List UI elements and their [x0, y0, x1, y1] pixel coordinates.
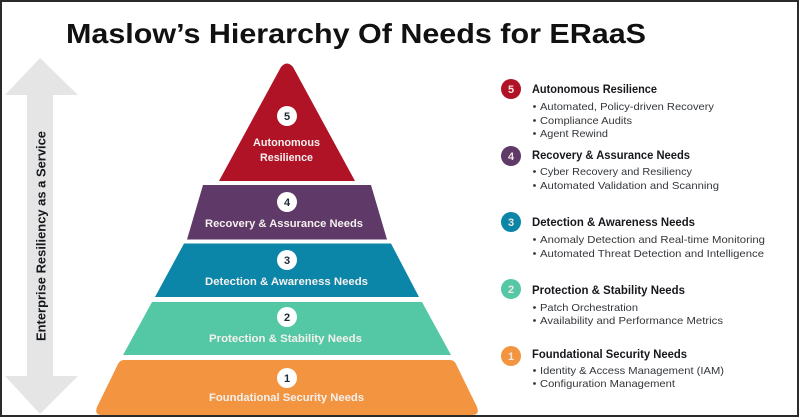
- legend 5: Autonomous Resilience: Automated, Policy-driven Recovery: [540, 101, 715, 113]
- legend 5: Autonomous Resilience: Compliance Audits: [540, 115, 632, 127]
- legend 5: Autonomous Resilience: 5: [508, 84, 514, 96]
- tier 2: Protection & Stability Needs: Protection & Stability Needs: [209, 333, 362, 345]
- tier 4: Recovery & Assurance Needs: 4: [284, 197, 291, 209]
- tier 3: Detection & Awareness Needs: Detection & Awareness Needs: [205, 276, 368, 288]
- title: Maslow’s Hierarchy Of Needs for ERaaS: [66, 18, 646, 49]
- legend 5: Autonomous Resilience: Agent Rewind: [540, 128, 608, 140]
- legend 5: Autonomous Resilience: Autonomous Resilience: [532, 84, 657, 96]
- tier 1: Foundational Security Needs: 1: [284, 373, 290, 385]
- tier 5: Autonomous Resilience: Autonomous: [253, 137, 320, 149]
- tier 4: Recovery & Assurance Needs: [187, 185, 387, 240]
- legend 2: Protection & Stability Needs: Patch Orchestration: [540, 302, 638, 314]
- tier 3: Detection & Awareness Needs: [155, 244, 419, 297]
- legend 2: Protection & Stability Needs: Availability and Performance Metrics: [540, 315, 723, 327]
- tier 2: Protection & Stability Needs: 2: [284, 312, 290, 324]
- legend 2: Protection & Stability Needs: [501, 279, 723, 327]
- legend 4: Recovery & Assurance Needs: Cyber Recovery and Resiliency: [540, 166, 693, 178]
- legend 3: Detection & Awareness Needs: Automated Threat Detection and Intelligence: [540, 248, 764, 260]
- legend 1: Foundational Security Needs: Foundational Security Needs: [532, 349, 687, 361]
- legend 1: Foundational Security Needs: Identity & Access Management (IAM): [540, 365, 724, 377]
- tier 1: Foundational Security Needs: Foundational Security Needs: [209, 392, 364, 404]
- legend 4: Recovery & Assurance Needs: 4: [508, 151, 515, 163]
- legend 5: Autonomous Resilience: [501, 79, 715, 140]
- legend 3: Detection & Awareness Needs: [501, 212, 765, 260]
- legend 3: Detection & Awareness Needs: Detection & Awareness Needs: [532, 217, 695, 229]
- legend 4: Recovery & Assurance Needs: Recovery & Assurance Needs: [532, 150, 690, 162]
- legend list: [501, 79, 765, 390]
- legend 1: Foundational Security Needs: 1: [508, 351, 514, 363]
- legend 4: Recovery & Assurance Needs: Automated Validation and Scanning: [540, 180, 719, 192]
- legend 4: Recovery & Assurance Needs: [501, 146, 719, 192]
- arrow label: Enterprise Resiliency as a Service: [34, 131, 48, 341]
- legend 1: Foundational Security Needs: Configuration Management: [540, 378, 675, 390]
- legend 3: Detection & Awareness Needs: Anomaly Detection and Real-time Monitoring: [540, 234, 765, 246]
- double-headed vertical arrow: Enterprise Resiliency as a Service: [5, 58, 78, 414]
- tier 5: Autonomous Resilience: [219, 64, 355, 181]
- legend 1: Foundational Security Needs: [501, 346, 724, 390]
- tier 4: Recovery & Assurance Needs: Recovery & Assurance Needs: [205, 218, 363, 230]
- arrow shape: [5, 58, 78, 414]
- tier 2: Protection & Stability Needs: [123, 302, 451, 355]
- tier 5: Autonomous Resilience: Resilience: [260, 152, 313, 164]
- tier 5: Autonomous Resilience: 5: [284, 111, 290, 123]
- legend 2: Protection & Stability Needs: Protection & Stability Needs: [532, 285, 685, 297]
- tier 3: Detection & Awareness Needs: 3: [284, 255, 290, 267]
- legend 2: Protection & Stability Needs: 2: [508, 284, 514, 296]
- legend 3: Detection & Awareness Needs: 3: [508, 217, 514, 229]
- tier 1: Foundational Security Needs: [96, 360, 478, 415]
- pyramid: [96, 64, 478, 415]
